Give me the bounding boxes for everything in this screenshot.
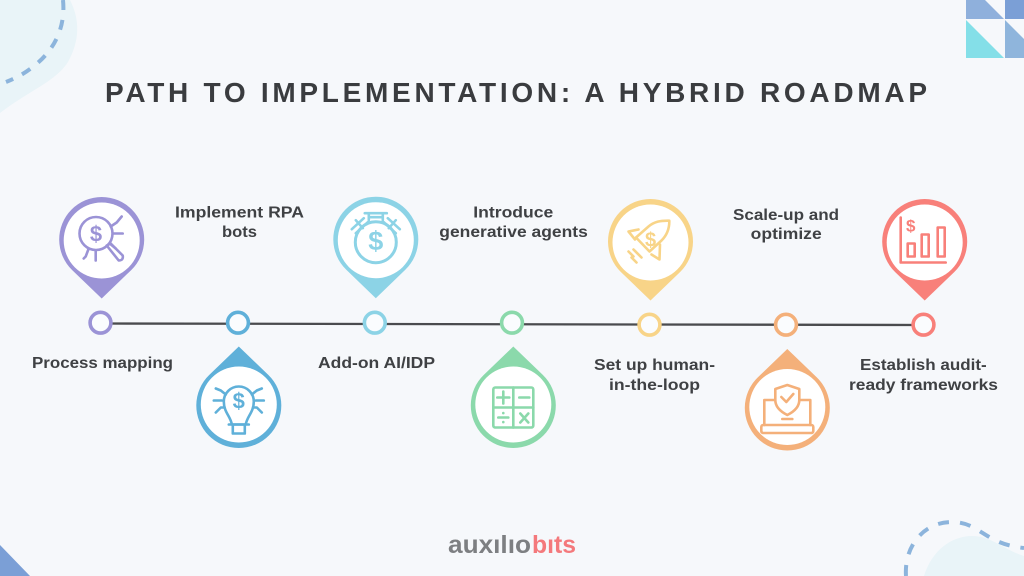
label: implement RPA bots: Implement RPA bbox=[175, 204, 304, 222]
label: add-on AI/IDP: Add-on AI/IDP bbox=[318, 355, 435, 372]
label: establish audit-ready frameworks: Establish audit- bbox=[860, 357, 987, 374]
pin 3: add-on AI/IDP icon bbox=[333, 197, 418, 298]
pin 1: process mapping icon: $ bbox=[90, 222, 102, 246]
label: introduce generative agents: Introduce bbox=[473, 204, 554, 222]
pin 2: implement RPA bots icon bbox=[196, 346, 281, 448]
label: set up human-in-the-loop: Set up human- bbox=[594, 357, 715, 374]
label: process mapping: Process mapping bbox=[32, 355, 173, 372]
pin 1: process mapping icon bbox=[59, 197, 144, 298]
decoration: top-left blob bbox=[0, 0, 77, 113]
label: set up human-in-the-loop bbox=[594, 357, 715, 394]
label: establish audit-ready frameworks bbox=[849, 357, 998, 394]
pin 4: introduce generative agents icon bbox=[471, 346, 556, 448]
pin 7: establish audit-ready frameworks icon bbox=[882, 199, 967, 300]
decoration: top-right triangles bbox=[966, 0, 1024, 58]
pin 3: add-on AI/IDP icon: $ bbox=[368, 226, 383, 256]
pin 7: establish audit-ready frameworks icon: $ bbox=[906, 216, 916, 236]
pin 6: scale-up and optimize icon bbox=[745, 349, 830, 450]
label: implement RPA bots: bots bbox=[222, 224, 257, 241]
logo: auxiliobits: bıts bbox=[532, 531, 576, 559]
pin 2: implement RPA bots icon: $ bbox=[233, 388, 245, 414]
label: introduce generative agents bbox=[439, 204, 588, 241]
decoration: bottom-left triangle bbox=[0, 545, 30, 576]
timeline nodes bbox=[90, 312, 934, 335]
label: introduce generative agents: generative agents bbox=[439, 224, 588, 241]
pin 5: set up human-in-the-loop icon bbox=[608, 199, 693, 300]
title: PATH TO IMPLEMENTATION: A HYBRID ROADMAP bbox=[105, 77, 927, 108]
pin 5: set up human-in-the-loop icon: $ bbox=[645, 230, 656, 252]
timeline line bbox=[100, 324, 923, 325]
decoration: bottom-right blob bbox=[906, 522, 1024, 576]
logo: auxiliobits bbox=[448, 531, 576, 559]
logo: auxiliobits: auxılıo bbox=[448, 531, 531, 559]
label: scale-up and optimize: optimize bbox=[751, 226, 822, 243]
label: implement RPA bots bbox=[175, 204, 304, 241]
label: scale-up and optimize: Scale-up and bbox=[733, 207, 839, 224]
label: set up human-in-the-loop: in-the-loop bbox=[609, 377, 700, 394]
label: establish audit-ready frameworks: ready frameworks bbox=[849, 377, 998, 394]
label: scale-up and optimize bbox=[733, 207, 839, 243]
